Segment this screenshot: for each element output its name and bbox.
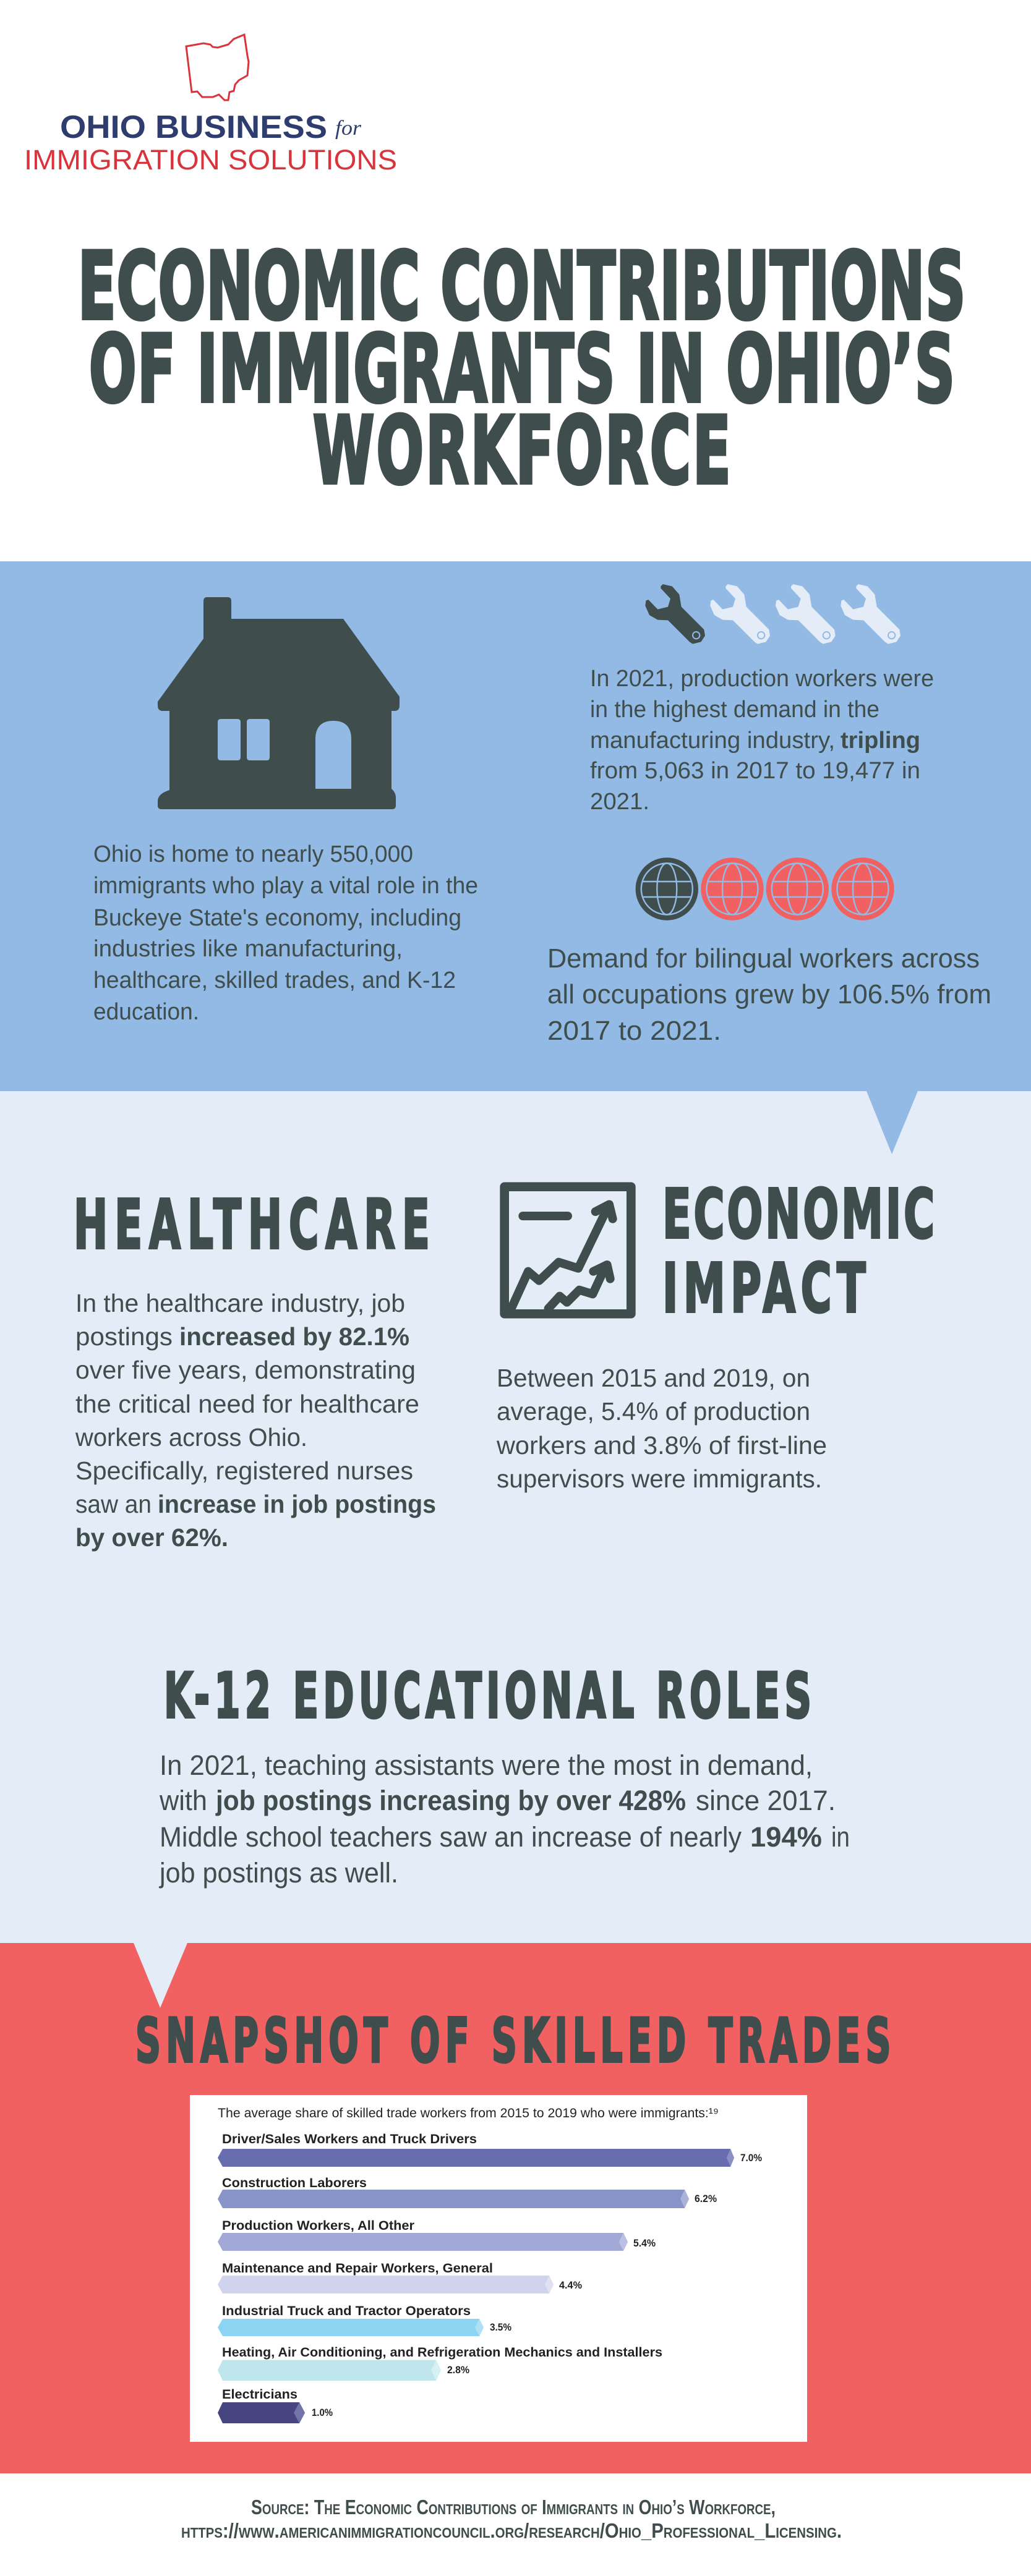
title [78,233,965,505]
text: healthcare: over five years, demonstrating [75,1356,416,1384]
text: Ohio is home: education. [93,999,199,1025]
panel: overview (blue) [0,561,1031,1091]
icon row: wrenches [645,584,901,644]
bar: Driver/Sales Workers and Truck Drivers [218,2132,762,2167]
title: OF IMMIGRANTS IN OHIO’S [89,316,955,423]
logo: Ohio Business for Immigration Solutions: IMMIGRATION SOLUTIONS [24,144,397,176]
bar: Maintenance and Repair Workers, General [218,2261,582,2293]
text: K-12: job postings increasing by over 428% [215,1785,686,1816]
text: healthcare: saw an [75,1490,152,1518]
title: ECONOMIC CONTRIBUTIONS [78,233,965,341]
text: healthcare: workers across Ohio. [75,1423,307,1452]
text: bilingual workers [547,943,991,1046]
text: K-12: In 2021, teaching assistants were the most in demand, [160,1749,813,1781]
source footer [181,2496,842,2542]
text: healthcare: postings [75,1322,173,1351]
text: K-12: Middle school teachers saw an increase of nearly [160,1821,742,1853]
text: Ohio is home: Ohio is home to nearly 550,000 [93,841,413,867]
text: K-12 [158,1749,850,1889]
bar: Electricians: Electricians [222,2387,297,2402]
heading: economic impact [662,1175,935,1328]
text: healthcare: the critical need for healthcare [75,1390,419,1418]
text: production workers [590,666,934,815]
text: production workers: manufacturing industry, [590,728,835,754]
icon row: globes [636,857,894,920]
text: Ohio is home: immigrants who play a vital role in the [93,873,478,899]
bar: Construction Laborers [218,2176,717,2208]
text: Ohio is home: Buckeye State's economy, including [93,905,461,931]
bar: Maintenance and Repair Workers, General: Maintenance and Repair Workers, General [222,2261,493,2276]
panel: skilled trades (red) [0,1943,1031,2473]
logo: Ohio Business for Immigration Solutions [24,35,397,176]
arrow: light pointer [134,1943,187,2008]
text: healthcare: by over 62%. [75,1523,228,1552]
text: healthcare [75,1289,436,1552]
text: economic impact: supervisors were immigrants. [497,1464,822,1493]
bar: Production Workers, All Other [218,2219,656,2251]
text: production workers: in the highest demand in the [590,697,879,723]
text: Ohio is home: healthcare, skilled trades, and K-12 [93,967,456,993]
bar: Industrial Truck and Tractor Operators: Industrial Truck and Tractor Operators [222,2304,471,2318]
bar: Construction Laborers: 6.2% [695,2193,717,2204]
bar: Industrial Truck and Tractor Operators [218,2304,511,2336]
heading: economic impact: ECONOMIC [662,1175,935,1254]
heading: economic impact: IMPACT [662,1249,866,1328]
bar: Electricians [218,2387,333,2423]
logo: Ohio Business for Immigration Solutions: OHIO BUSINESS [60,109,327,145]
text: Ohio is home: industries like manufacturing, [93,936,403,962]
text: healthcare: In the healthcare industry, job [75,1289,405,1317]
bar: HVAC Mechanics and Installers: 2.8% [447,2364,469,2376]
text: K-12: with [159,1785,207,1816]
text: Ohio is home [93,841,478,1025]
bar: HVAC Mechanics and Installers [218,2345,662,2381]
source footer: Source: The Economic Contributions of Immigrants in Ohio’s Workforce, [251,2496,776,2519]
text: bilingual workers: Demand for bilingual workers across [547,943,980,974]
heading: K-12 educational roles: K-12 EDUCATIONAL ROLES [164,1660,811,1732]
arrow: blue pointer [866,1091,918,1154]
text: bilingual workers: 2017 to 2021. [547,1016,721,1046]
icon: house [158,597,400,809]
text: production workers: tripling [841,728,920,754]
text: K-12: in [831,1821,850,1853]
text: economic impact: Between 2015 and 2019, on [497,1364,810,1392]
logo: Ohio Business for Immigration Solutions: for [335,117,362,140]
text: healthcare: increased by 82.1% [179,1322,409,1351]
text: K-12: 194% [750,1821,822,1853]
bar: Driver/Sales Workers and Truck Drivers: 7.0% [740,2152,762,2164]
heading: healthcare: HEALTHCARE [74,1186,430,1265]
chart title: The average share of skilled trade workers from 2015 to 2019 who were immigrants:¹⁹ [218,2106,719,2120]
text: economic impact: average, 5.4% of production [497,1397,810,1426]
text: healthcare: increase in job postings [158,1490,436,1518]
text: healthcare: Specifically, registered nurses [75,1456,413,1485]
text: production workers: from 5,063 in 2017 to 19,477 in [590,758,920,784]
text: production workers: In 2021, production workers were [590,666,934,692]
text: economic impact [496,1364,827,1493]
text: production workers: 2021. [590,789,649,815]
bar: Driver/Sales Workers and Truck Drivers: Driver/Sales Workers and Truck Drivers [222,2132,477,2146]
bar: Industrial Truck and Tractor Operators: 3.5% [490,2321,511,2333]
icon: rising chart [505,1187,631,1314]
heading: snapshot of skilled trades: SNAPSHOT OF SKILLED TRADES [135,2005,891,2076]
panel: sectors (light blue) [0,1091,1031,1943]
bar: Maintenance and Repair Workers, General: 4.4% [559,2279,582,2291]
text: K-12: job postings as well. [158,1857,398,1889]
bar: Construction Laborers: Construction Laborers [222,2176,367,2190]
source footer: https://www.americanimmigrationcouncil.org/research/Ohio_Professional_Licensing. [181,2519,842,2542]
bar: Production Workers, All Other: 5.4% [633,2237,656,2249]
title: WORKFORCE [313,397,731,505]
bar: Electricians: 1.0% [312,2407,333,2418]
text: K-12: since 2017. [696,1785,836,1816]
text: bilingual workers: all occupations grew by 106.5% from [547,979,991,1010]
text: economic impact: workers and 3.8% of first-line [496,1431,827,1460]
bar: HVAC Mechanics and Installers: Heating, Air Conditioning, and Refrigeration Mechanics and Installers [222,2345,662,2360]
bar: Production Workers, All Other: Production Workers, All Other [222,2219,414,2233]
chart: skilled trade shares [190,2095,807,2442]
